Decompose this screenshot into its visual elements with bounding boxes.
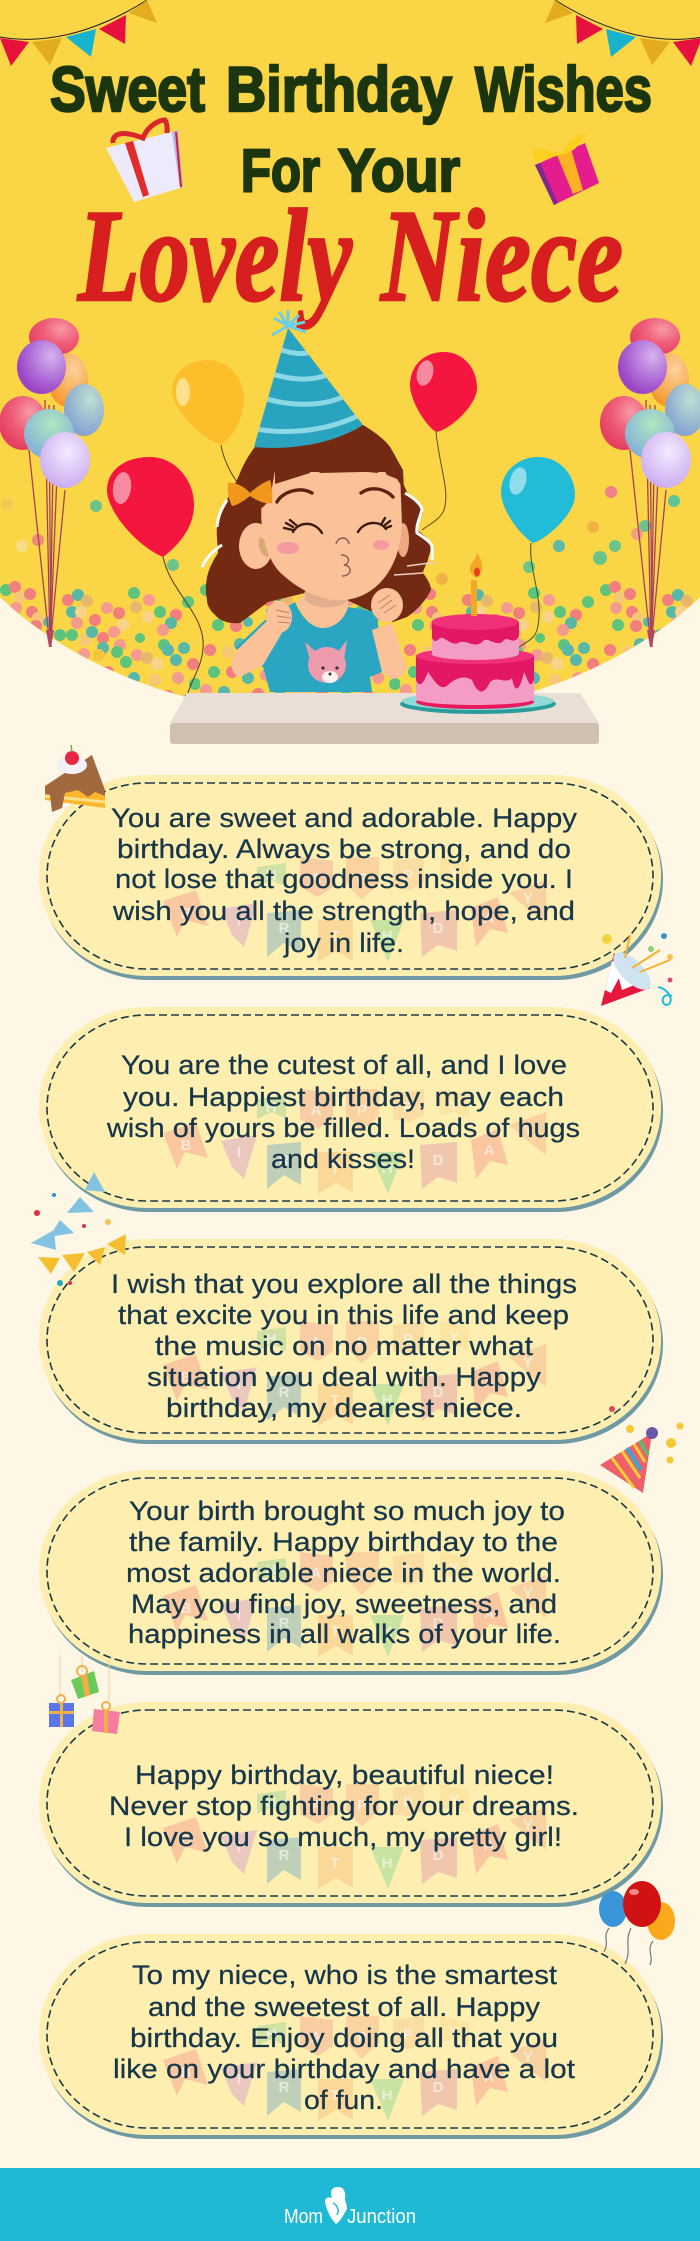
logo: MomJunction: Junction [347,2206,416,2228]
wish text: birthday. Enjoy doing all that you [130,2023,558,2053]
card 6: BIRTHDAY [181,2049,533,2104]
arm right [372,623,407,679]
balloon: blue [501,457,575,648]
title: Birthday [226,55,452,125]
bunting: top left [0,0,157,66]
icon: pink gift [533,133,599,205]
header yellow dome [0,0,700,720]
wish text [111,1269,577,1423]
arm left [231,620,282,677]
eyebrows [277,489,393,502]
wish text: that excite you in this life and keep [118,1300,569,1330]
wish text: Your birth brought so much joy to [129,1496,565,1526]
wish text: I wish that you explore all the things [111,1269,577,1299]
card 3 [39,1239,663,1444]
logo: MomJunction: Mom [284,2206,323,2228]
card 6: HAPPY [266,2024,459,2046]
title: Sweet [50,55,205,125]
title: Your [338,137,460,204]
wish text: the music on no matter what [155,1331,534,1361]
bunny on shirt [305,640,347,683]
title: Wishes [475,55,652,125]
card 5: HAPPY [266,1792,459,1814]
string: red left balloon [163,557,203,697]
title: Lovely [77,182,352,329]
balloon: red top [410,352,477,530]
card 4: HAPPY [266,1560,459,1582]
illustration: girl [202,425,437,692]
icon: hanging gifts [49,1655,120,1734]
ear right [397,523,409,557]
card 2 [39,1007,663,1212]
icon: white gift [106,120,183,202]
card 6 [39,1934,663,2139]
wish text: You are sweet and adorable. Happy [111,803,578,833]
wish text: birthday, my dearest niece. [166,1393,522,1423]
fists [266,601,292,633]
title [50,55,652,329]
bow [228,480,272,506]
hair [206,425,431,623]
card 2: HAPPY [266,1097,459,1119]
neck [297,592,348,628]
ear left [239,523,273,569]
balloon: yellow [172,360,244,482]
nose and lips [336,538,350,576]
wish text: most adorable niece in the world. [126,1558,561,1588]
card 1: HAPPY [266,865,459,887]
wish text: Happy birthday, beautiful niece! [135,1760,554,1790]
shirt [235,602,382,692]
wish text: not lose that goodness inside you. I [115,864,573,894]
logo: MomJunction [284,2187,416,2228]
wish text: Never stop fighting for your dreams. [109,1791,579,1821]
wish text: wish of yours be filled. Loads of hugs [106,1113,580,1143]
title: For [241,137,320,204]
card 4 [39,1470,663,1675]
icon: three balloons [599,1881,675,1965]
wish text: happiness in all walks of your life. [128,1619,561,1649]
icon: party hat [600,1406,684,1493]
wish text: birthday. Always be strong, and do [117,834,571,864]
card 4: BIRTHDAY [181,1585,533,1640]
wish text: May you find joy, sweetness, and [131,1589,557,1619]
cake [400,553,556,714]
card 1: BIRTHDAY [181,890,533,945]
hair strands [394,562,437,575]
wish text [113,1960,576,2115]
wish text [126,1496,565,1649]
wish text: joy in life. [283,928,404,958]
eyes [284,518,391,533]
wish text: situation you deal with. Happy [147,1362,542,1392]
icon: party popper [601,933,673,1006]
balloon cluster: right [600,318,700,647]
wish text: To my niece, who is the smartest [132,1960,558,1990]
icon: bunting with confetti [31,1172,126,1286]
table [170,693,599,744]
wish text: of fun. [304,2085,383,2115]
footer banner [0,2168,700,2241]
balloon cluster: left [0,318,104,647]
card 1 [39,775,663,980]
white hair streaks [202,493,432,567]
wish text: wish you all the strength, hope, and [112,896,575,926]
bangs [240,425,404,508]
wish text: I love you so much, my pretty girl! [124,1822,562,1852]
face [261,472,402,600]
cheeks [277,542,299,554]
icon: cake slice [45,745,105,812]
wish text: and the sweetest of all. Happy [148,1992,541,2022]
card 3: BIRTHDAY [181,1354,533,1409]
card 5 [39,1702,663,1907]
wish text [111,803,578,958]
wish text: like on your birthday and have a lot [113,2054,576,2084]
bunting: top right [545,0,700,66]
card 2: BIRTHDAY [181,1122,533,1177]
pom [272,310,306,335]
wish text: and kisses! [271,1144,415,1174]
wish text: you. Happiest birthday, may each [123,1082,564,1112]
card 5: BIRTHDAY [181,1817,533,1872]
balloon: red left [107,457,194,557]
wish text [109,1760,579,1852]
wish text: You are the cutest of all, and I love [121,1050,567,1080]
card 3: HAPPY [266,1329,459,1351]
wish text [106,1050,580,1174]
title: Niece [379,182,623,329]
wish text: the family. Happy birthday to the [129,1527,558,1557]
party hat on girl [250,310,363,448]
